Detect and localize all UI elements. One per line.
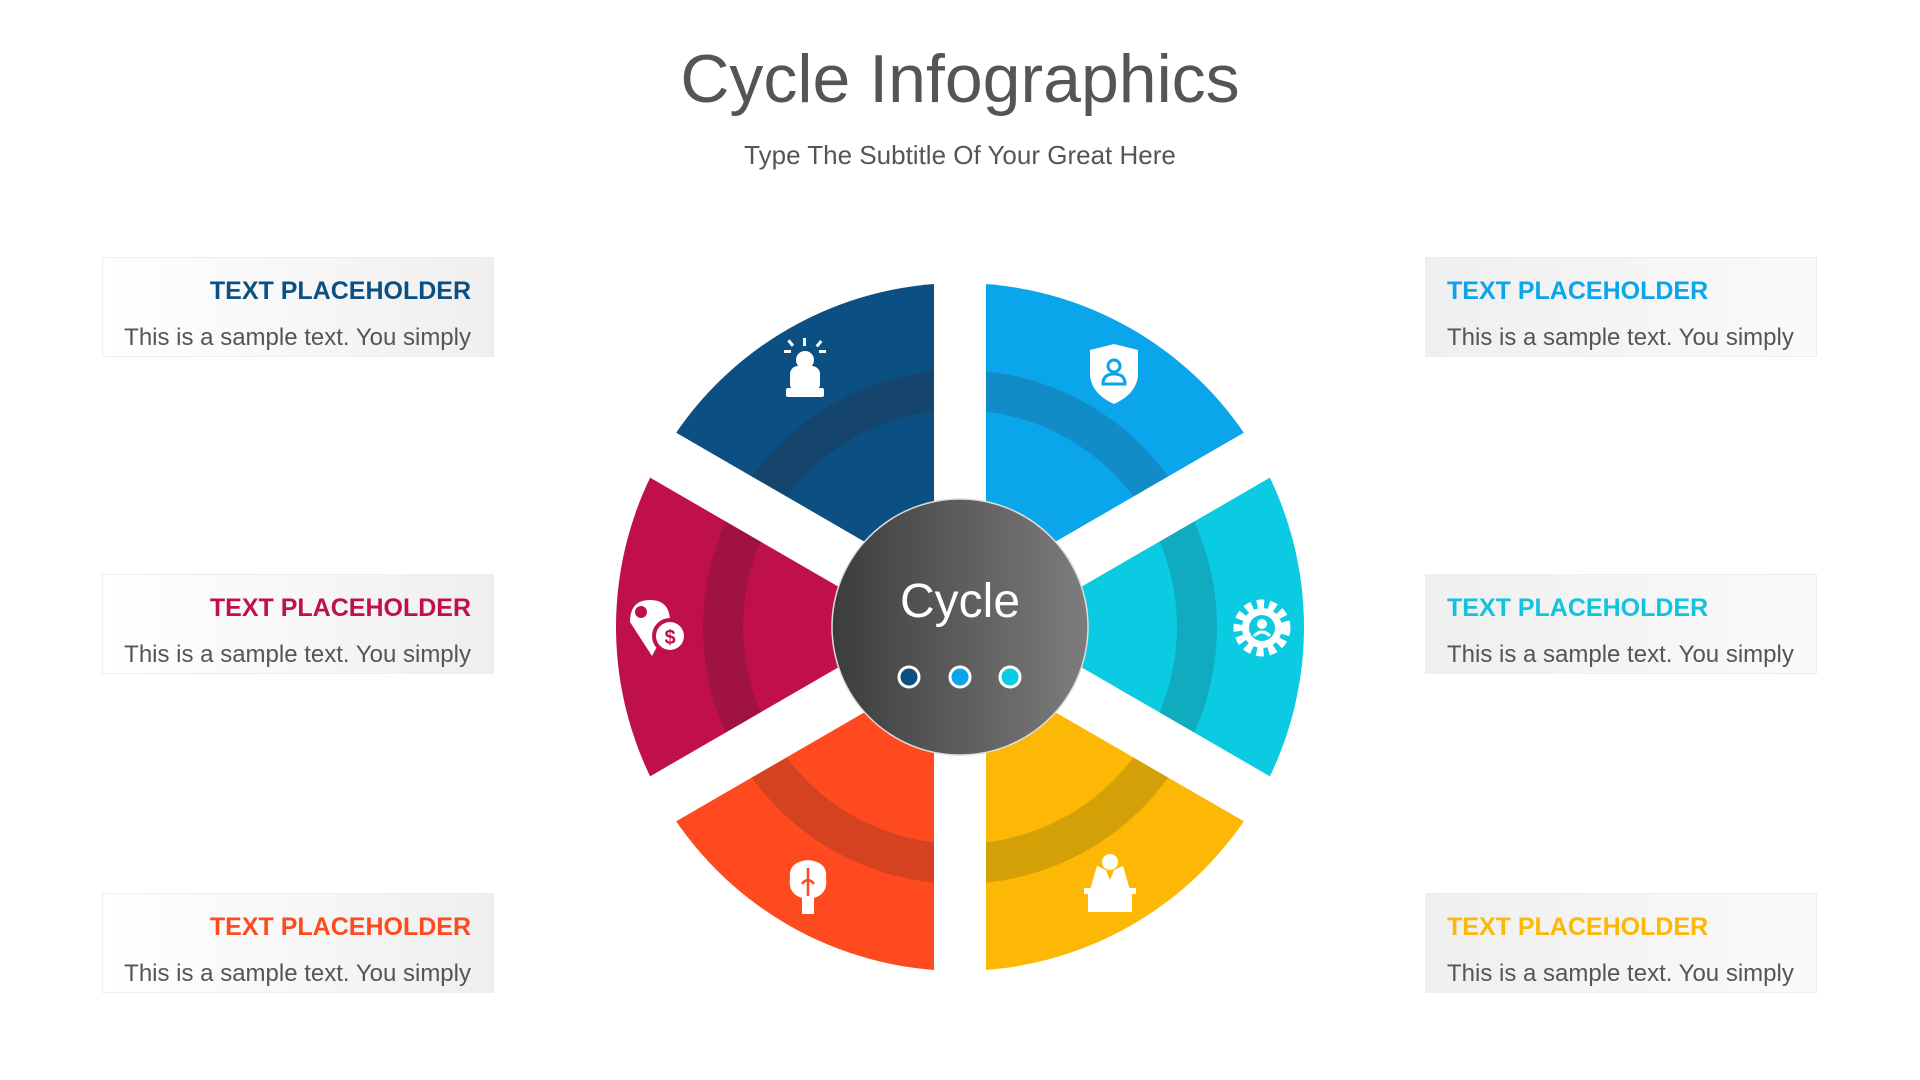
segment: bottom right (960, 627, 1258, 971)
text box: bottom left: This is a sample text. You simply (124, 960, 471, 987)
text box: top right (1425, 257, 1817, 357)
segment: right (960, 455, 1304, 799)
text box: bottom right: TEXT PLACEHOLDER (1447, 913, 1708, 941)
icon: podium speakers (bottom right) (1084, 854, 1136, 912)
icon: shield user (top right) (1090, 344, 1138, 404)
text box: top right: This is a sample text. You simply (1447, 324, 1794, 351)
text box: middle right: This is a sample text. You simply (1447, 641, 1794, 668)
text box: middle left (102, 574, 494, 674)
icon: location dollar (left): $ (664, 627, 676, 649)
center circle (832, 499, 1088, 755)
text box: middle right: TEXT PLACEHOLDER (1447, 594, 1708, 622)
text box: middle left: TEXT PLACEHOLDER (210, 594, 471, 622)
icon: brain bulb (bottom left) (790, 860, 826, 914)
text box: bottom left (102, 893, 494, 993)
segment: left (616, 455, 960, 799)
text box: bottom left: TEXT PLACEHOLDER (210, 913, 471, 941)
segment: top right (960, 283, 1258, 627)
text box: top left (102, 257, 494, 357)
subtitle: Type The Subtitle Of Your Great Here (744, 140, 1176, 170)
title: Cycle Infographics (680, 41, 1240, 117)
text box: top left: This is a sample text. You simply (124, 324, 471, 351)
text box: bottom right (1425, 893, 1817, 993)
dots (899, 667, 1020, 687)
segment: bottom left (662, 627, 960, 971)
text box: bottom right: This is a sample text. You simply (1447, 960, 1794, 987)
icon: gear user (right) (1238, 604, 1286, 652)
center label: Cycle (900, 575, 1020, 628)
text box: top right: TEXT PLACEHOLDER (1447, 277, 1708, 305)
icon: idea fist (top left) (784, 338, 826, 397)
segment: top left (662, 283, 960, 627)
text box: top left: TEXT PLACEHOLDER (210, 277, 471, 305)
text box: middle right (1425, 574, 1817, 674)
text box: middle left: This is a sample text. You simply (124, 641, 471, 668)
icon: location dollar (left) (630, 600, 688, 656)
